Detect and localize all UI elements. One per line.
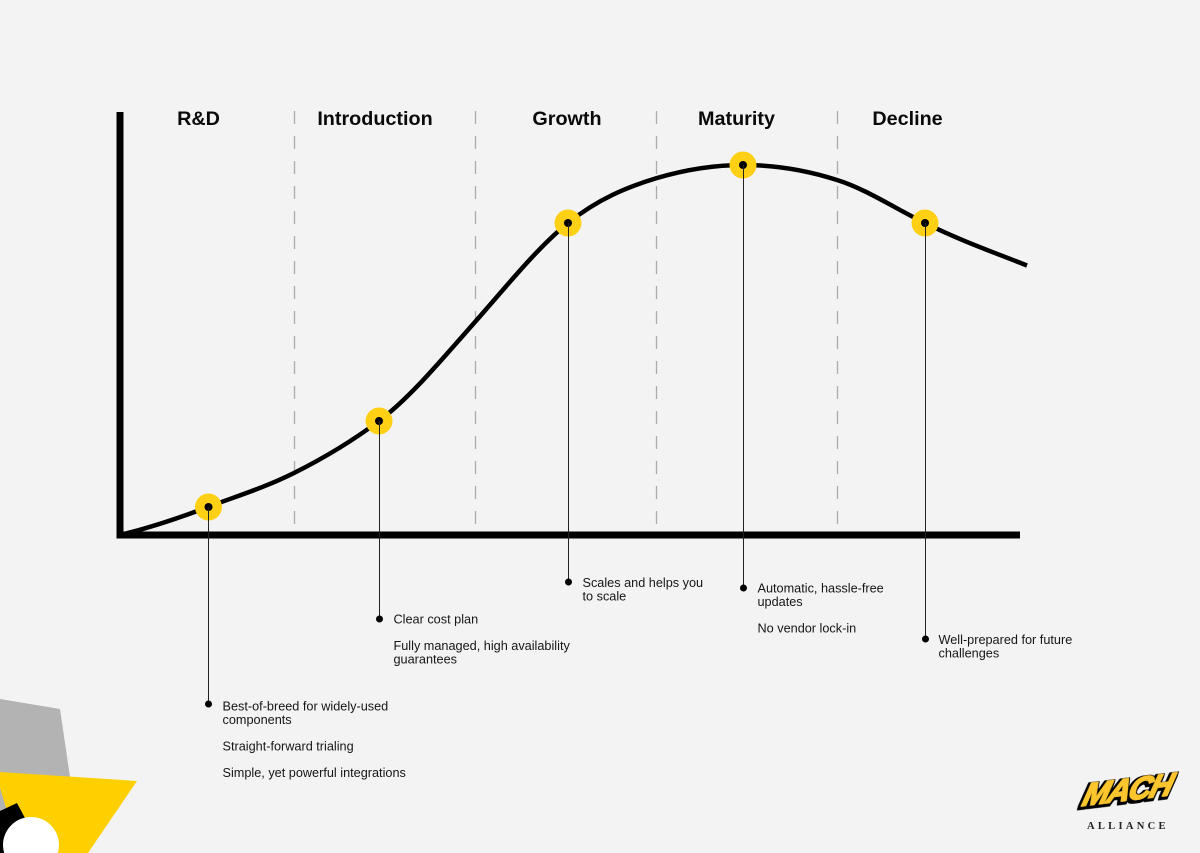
callout: Maturity: updates — [758, 595, 803, 609]
callout: Introduction: guarantees — [394, 652, 457, 666]
stage headings: Decline — [872, 108, 943, 130]
logo: MACH Alliance — [1079, 766, 1180, 832]
leader lines — [208, 165, 926, 704]
stage dividers — [294, 111, 838, 526]
stage headings — [177, 108, 943, 130]
stage headings: Growth — [532, 108, 602, 130]
stage headings: Maturity — [698, 108, 775, 130]
callout: Growth: Scales and helps you — [582, 576, 703, 590]
callout: R&D — [205, 700, 406, 780]
callout: R&D: Simple, yet powerful integrations — [222, 766, 406, 780]
callout: Introduction: Clear cost plan — [394, 612, 478, 626]
lifecycle curve — [120, 165, 1027, 535]
callout: R&D: components — [222, 713, 292, 727]
callout: Introduction — [376, 612, 570, 666]
stage headings: R&D — [177, 108, 220, 130]
callout: Decline: challenges — [938, 646, 999, 660]
chart axes — [120, 112, 1020, 535]
callout: Decline: Well-prepared for future — [938, 633, 1072, 647]
curve markers — [195, 152, 938, 520]
logo: MACH Alliance: ALLIANCE — [1087, 821, 1169, 832]
callout: R&D: Straight-forward trialing — [222, 740, 354, 754]
callout: Introduction: Fully managed, high availability — [394, 639, 570, 653]
callout: Growth — [565, 576, 703, 604]
callout: Maturity — [740, 582, 884, 636]
callout: Decline — [922, 633, 1072, 660]
logo: MACH Alliance: MACH — [1079, 766, 1180, 813]
callout: R&D: Best-of-breed for widely-used — [222, 700, 388, 714]
stage headings: Introduction — [317, 108, 433, 130]
callout: Growth: to scale — [582, 590, 626, 604]
callout: Maturity: No vendor lock-in — [758, 622, 856, 636]
callout: Maturity: Automatic, hassle-free — [758, 582, 884, 596]
decorative corner shapes — [0, 699, 137, 853]
